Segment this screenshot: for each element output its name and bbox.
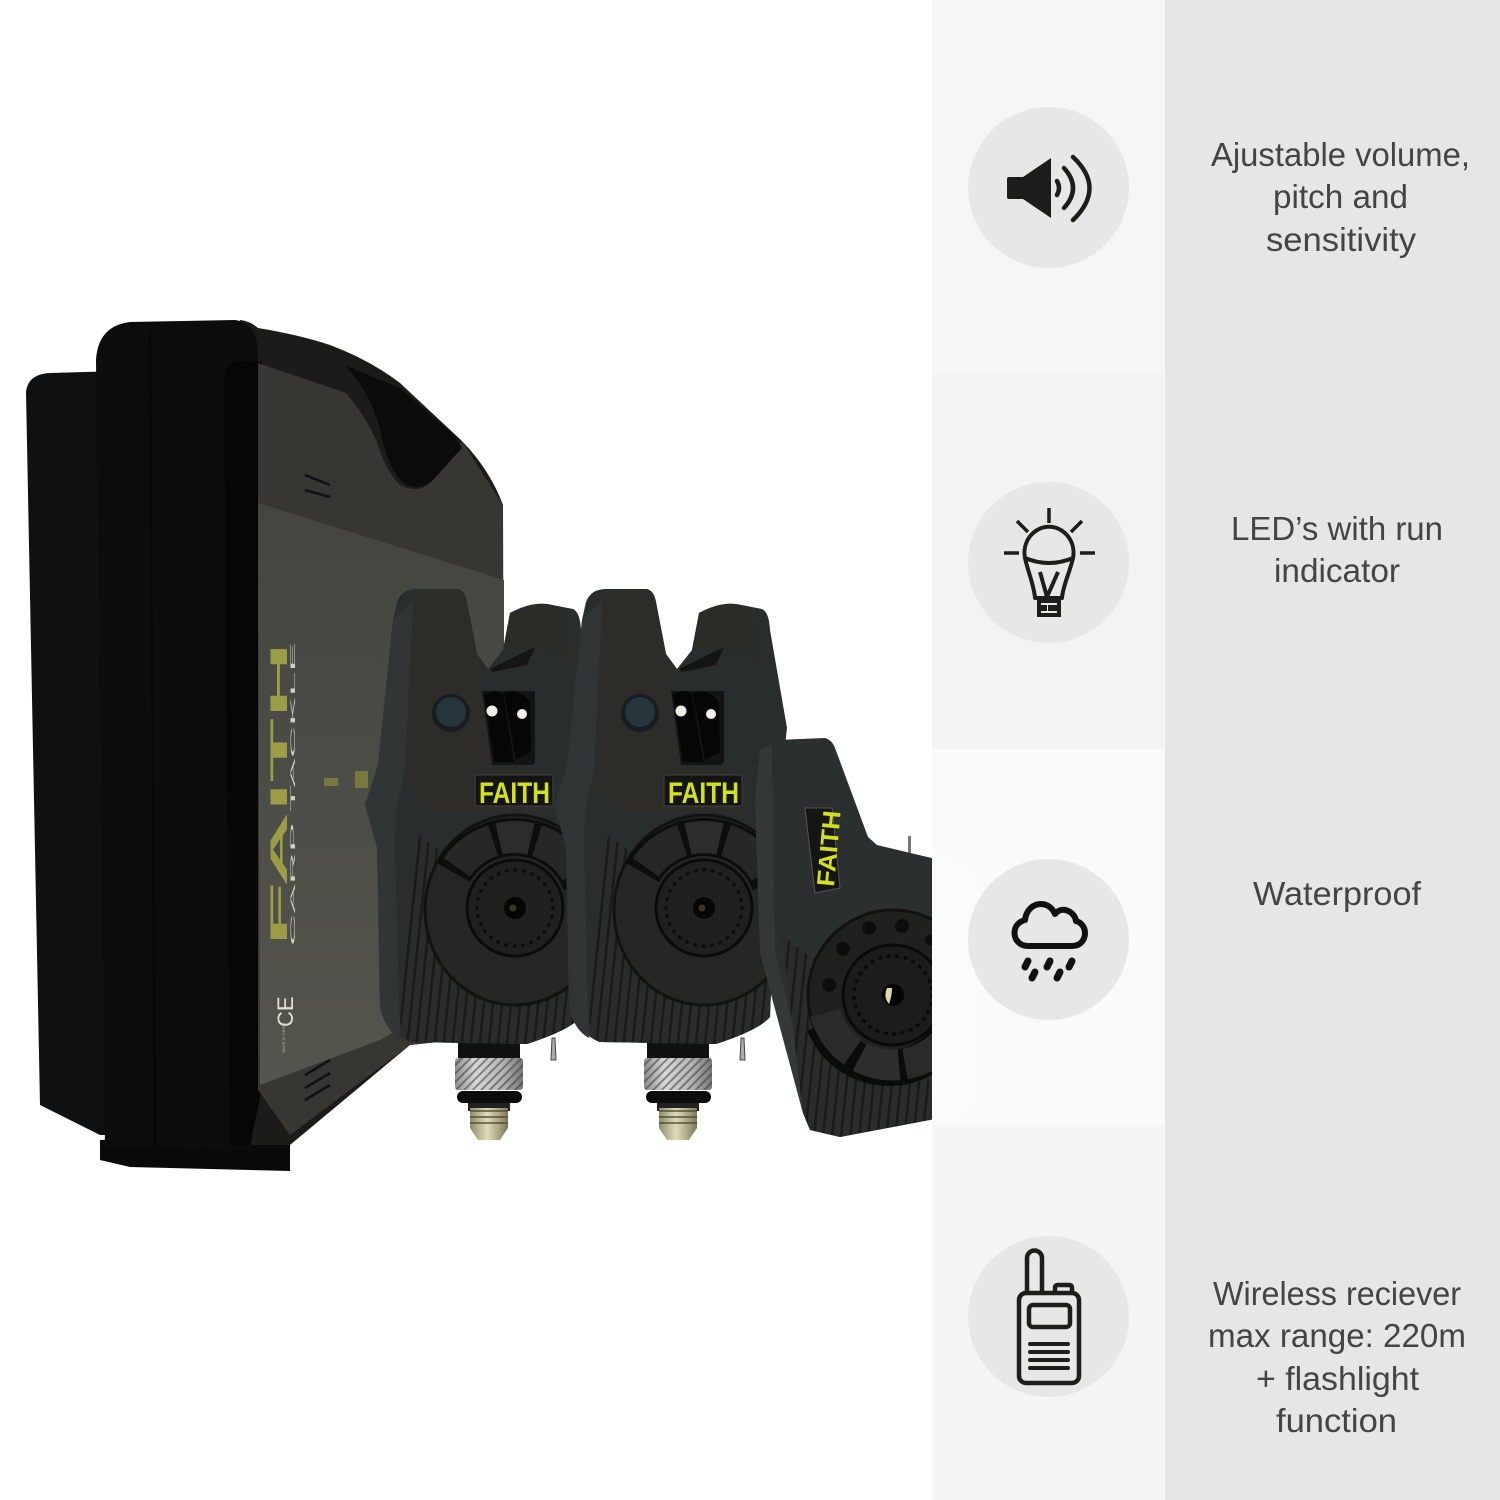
feature text: LEDs: LED’s with run xyxy=(1231,510,1443,547)
made in china: MADE IN CHINA xyxy=(281,1022,286,1053)
feature text: LEDs xyxy=(1231,510,1443,589)
feature text: wireless receiver xyxy=(1208,1275,1466,1439)
feature text: volume: Ajustable volume, xyxy=(1211,136,1470,173)
icon: light bulb xyxy=(968,482,1129,643)
case front edge band xyxy=(224,361,262,1145)
icon: walkie-talkie xyxy=(968,1236,1129,1397)
CE mark: CE xyxy=(273,996,298,1027)
handle opening xyxy=(345,365,462,487)
case top outline and handle xyxy=(240,320,504,1145)
case back shell xyxy=(26,371,120,1135)
notches xyxy=(305,475,330,1100)
badge: FAITH: FAITH xyxy=(479,777,550,810)
feature text: wireless receiver: max range: 220m xyxy=(1208,1317,1466,1354)
case logo: CARP TACKLE xyxy=(291,642,297,946)
badge: FAITH: FAITH xyxy=(812,809,847,888)
feature text: volume xyxy=(1211,136,1470,258)
feature text: volume: pitch and xyxy=(1273,178,1408,215)
feature text: wireless receiver: Wireless reciever xyxy=(1213,1275,1461,1312)
product photo: carry case xyxy=(26,320,504,1171)
icon: rain cloud xyxy=(968,859,1129,1020)
feature text: LEDs: indicator xyxy=(1274,552,1400,589)
case logo: FAITH xyxy=(266,642,293,946)
case label panel xyxy=(258,503,504,1085)
photo fade overlay xyxy=(900,860,976,1120)
case face xyxy=(258,363,504,1135)
panel: icon column xyxy=(932,0,1165,1500)
case base lip xyxy=(100,1130,290,1171)
product photo: wireless receiver xyxy=(755,738,978,1137)
feature text: volume: sensitivity xyxy=(1266,221,1417,258)
feature text: wireless receiver: function xyxy=(1276,1402,1397,1439)
product photo: bite alarm 1 xyxy=(365,589,605,1140)
case logo xyxy=(266,642,297,946)
feature text: wireless receiver: + flashlight xyxy=(1256,1360,1419,1397)
feature text: waterproof: Waterproof xyxy=(1253,875,1422,912)
icon: speaker xyxy=(968,107,1129,268)
panel: text column xyxy=(1165,0,1500,1500)
label reflections xyxy=(324,771,368,788)
badge: FAITH: FAITH xyxy=(668,777,739,810)
product photo: bite alarm 2 xyxy=(554,589,794,1140)
case middle shell xyxy=(96,320,258,1150)
